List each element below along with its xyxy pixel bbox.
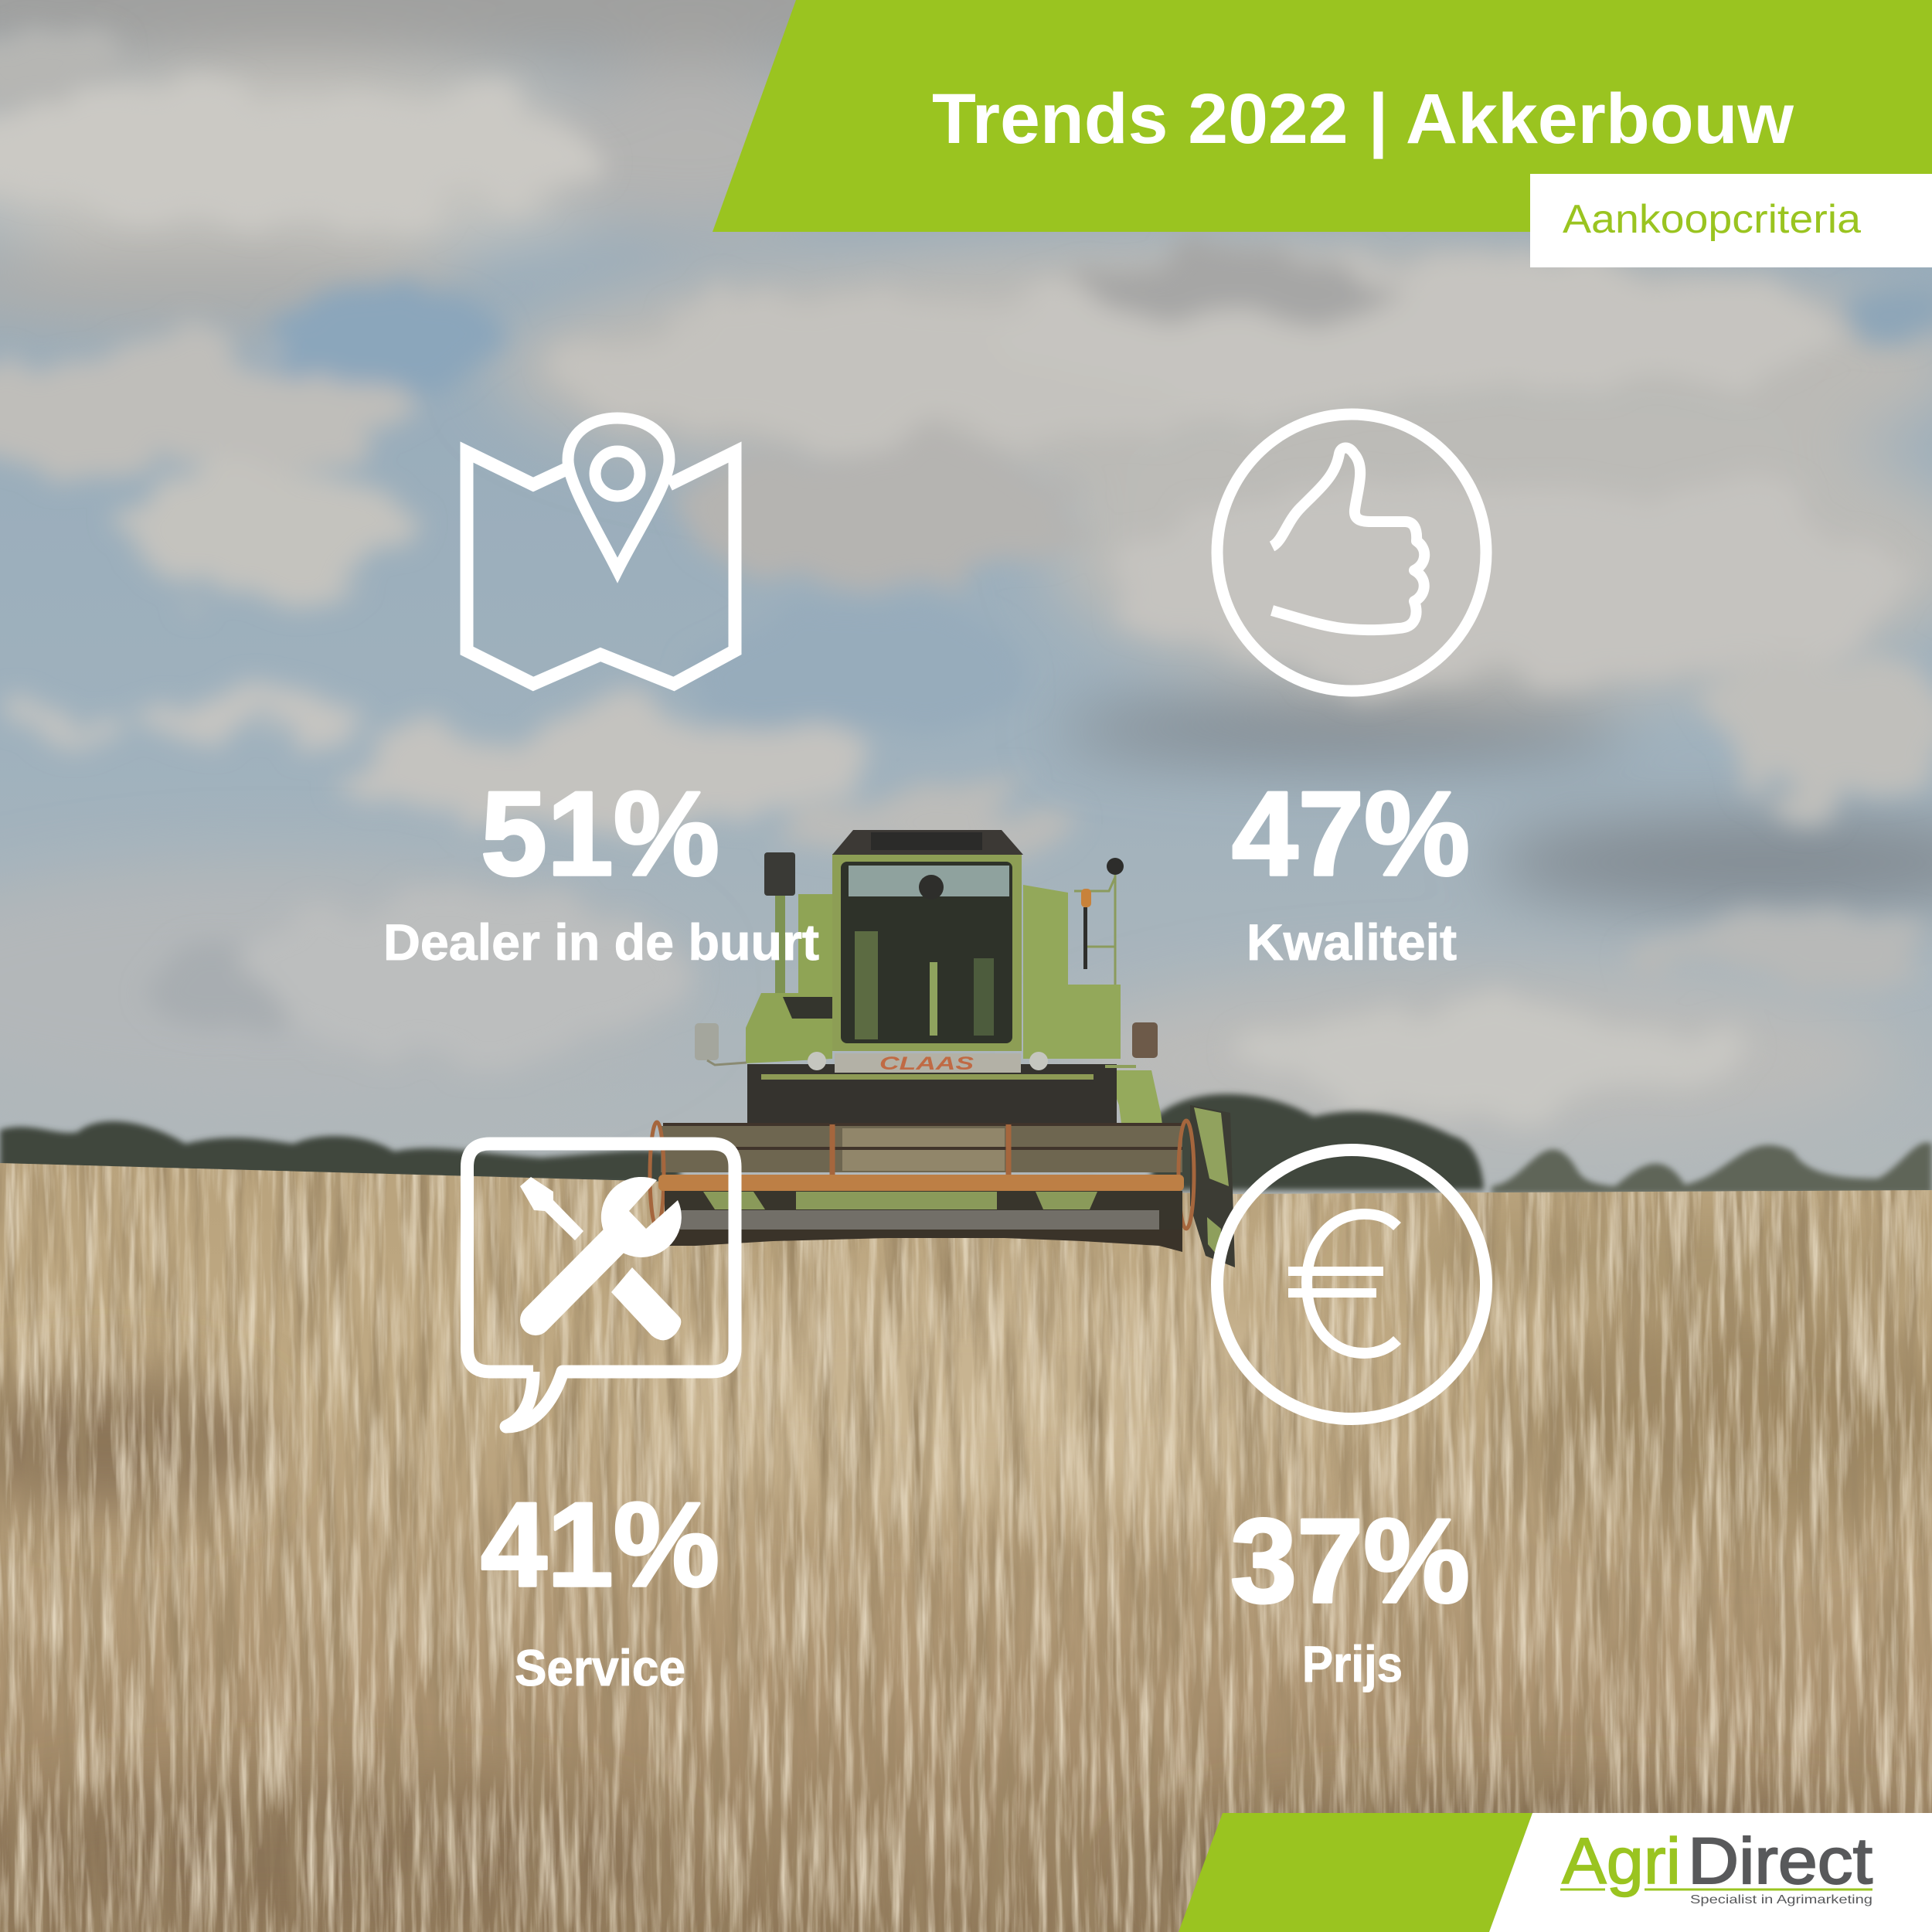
stat: 41%: 41% [481, 1478, 719, 1611]
label: Dealer in de buurt: Dealer in de buurt [383, 913, 819, 971]
icon: euro sign in circle [1217, 1150, 1486, 1419]
logo wordmark [1560, 1825, 1872, 1906]
icon: speech bubble with wrench and screwdriver [467, 1144, 735, 1427]
logo wordmark: Specialist in Agrimarketing [1690, 1893, 1872, 1906]
label: Service: Service [515, 1639, 685, 1696]
stat: 47%: 47% [1232, 767, 1470, 900]
label: Prijs: Prijs [1302, 1635, 1403, 1692]
harvester: body panels [746, 885, 1167, 1167]
background photo: tree line on the horizon [0, 1094, 1932, 1194]
harvester: mast and mirrors [695, 852, 1158, 1066]
header banner [713, 0, 1932, 232]
logo wordmark: Agri [1562, 1825, 1681, 1897]
stat: 37%: 37% [1230, 1494, 1470, 1628]
background photo: sky with clouds [0, 0, 1932, 1236]
icon: map with location pin [467, 418, 735, 684]
harvester: cutting header [650, 1121, 1194, 1252]
background photo: wheat field [0, 1159, 1932, 1932]
label: Kwaliteit: Kwaliteit [1247, 913, 1457, 971]
footer green slant [1179, 1813, 1532, 1932]
stat: 51%: 51% [481, 767, 719, 900]
harvester: cab [832, 830, 1023, 1051]
logo panel [1489, 1813, 1932, 1932]
subtitle tab [1530, 174, 1932, 267]
logo wordmark: Direct [1688, 1825, 1872, 1897]
harvester: brand panel: CLAAS [879, 1053, 974, 1074]
harvester: brand panel [808, 1052, 1048, 1074]
subtitle text: Aankoopcriteria [1563, 197, 1861, 242]
background photo: combine harvester [650, 830, 1235, 1267]
icon: thumbs up in circle [1217, 414, 1486, 691]
title: Trends 2022 | Akkerbouw [932, 80, 1794, 159]
harvester: dark rear tree mass and tire [1190, 1105, 1235, 1267]
